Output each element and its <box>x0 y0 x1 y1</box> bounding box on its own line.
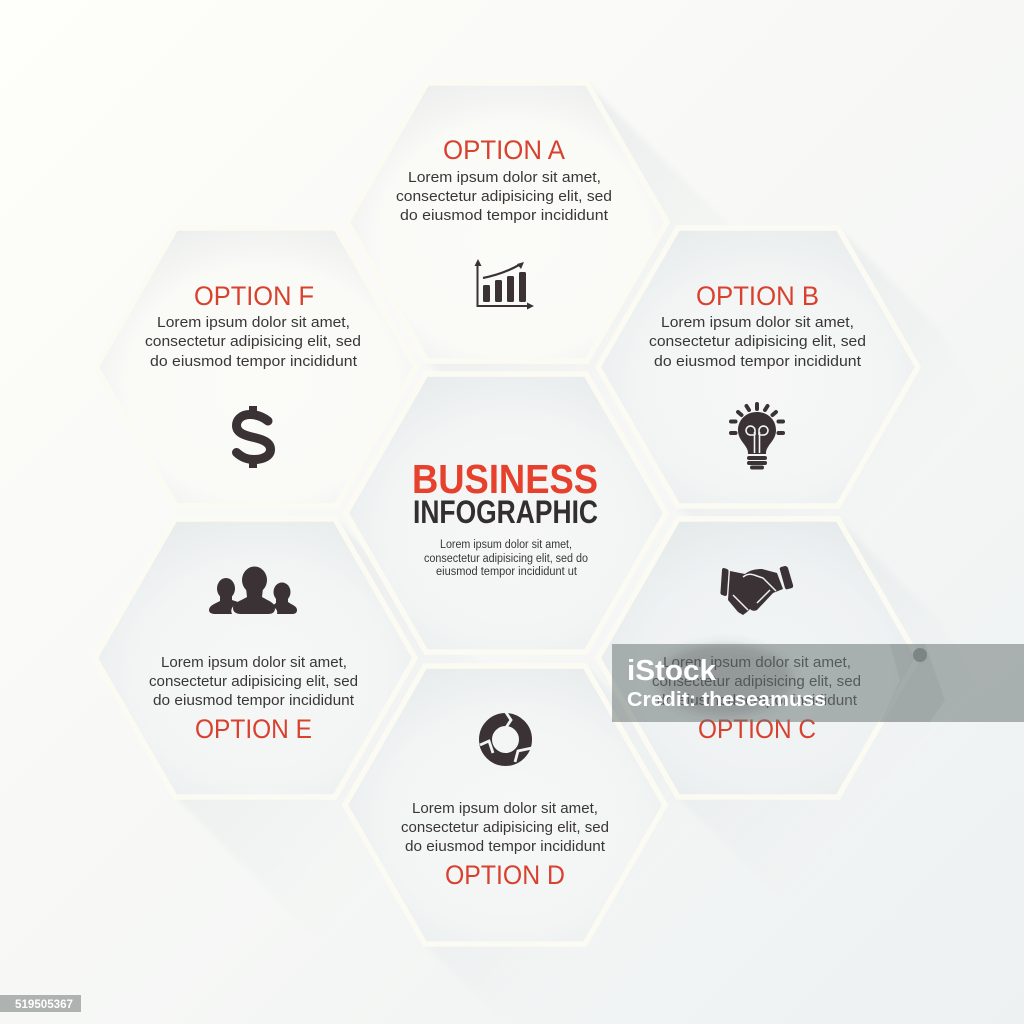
hexagon B <box>598 228 918 506</box>
long shadows <box>175 83 1018 1017</box>
watermark: credit: Credit: theseamuss <box>627 689 826 711</box>
text: option A body: Lorem ipsum dolor sit amet, <box>408 169 601 186</box>
image id tag <box>0 995 81 1012</box>
hexagon F <box>96 228 416 506</box>
heading: option D: OPTION D <box>445 860 565 890</box>
text: option A body <box>396 169 612 224</box>
text: centre body: consectetur adipisicing elit, sed do <box>424 553 588 565</box>
text: option D body: consectetur adipisicing elit, sed <box>401 819 609 836</box>
watermark: iStock: iStock <box>627 655 717 687</box>
text: option E body: consectetur adipisicing elit, sed <box>149 673 358 690</box>
text: option C body: consectetur adipisicing elit, sed <box>652 673 861 690</box>
text: option E body: Lorem ipsum dolor sit amet, <box>161 654 347 671</box>
title: business: BUSINESS <box>412 456 598 502</box>
panel: option A <box>347 83 667 361</box>
panel: option F <box>96 228 416 506</box>
text: option B body <box>649 314 866 370</box>
watermark band <box>612 644 1024 722</box>
hexagon D <box>345 666 665 944</box>
text: option A body: do eiusmod tempor incididunt <box>400 207 609 224</box>
text: option E body <box>149 654 358 709</box>
text: centre body: Lorem ipsum dolor sit amet, <box>440 539 572 551</box>
text: option F body: do eiusmod tempor incididunt <box>150 353 358 370</box>
text: option E body: do eiusmod tempor incididunt <box>153 692 355 709</box>
text: option A body: consectetur adipisicing elit, sed <box>396 188 612 205</box>
text: option D body: do eiusmod tempor incididunt <box>405 838 606 855</box>
text: option F body <box>145 314 361 370</box>
text: option B body: do eiusmod tempor incididunt <box>654 353 862 370</box>
panel: option D <box>345 666 665 944</box>
icon: cycle arrows <box>480 711 532 762</box>
text: option B body: consectetur adipisicing elit, sed <box>649 333 866 350</box>
panel: centre <box>346 374 666 652</box>
text: option D body: Lorem ipsum dolor sit amet, <box>412 800 598 817</box>
image id tag: 519505367 <box>15 999 73 1011</box>
title: infographic: INFOGRAPHIC <box>413 494 598 530</box>
text: centre body: eiusmod tempor incididunt ut <box>436 566 578 578</box>
text: option D body <box>401 800 609 855</box>
text: centre body <box>424 539 588 578</box>
heading: option C: OPTION C <box>698 714 816 744</box>
panel: option E <box>95 519 415 797</box>
icon: dollar sign <box>236 406 270 468</box>
text: option C body <box>652 654 861 709</box>
text: option F body: consectetur adipisicing elit, sed <box>145 333 361 350</box>
panel: option C <box>598 519 918 797</box>
icon: bar chart <box>474 259 534 310</box>
heading: option A: OPTION A <box>443 135 565 165</box>
hexagon centre <box>346 374 666 652</box>
text: option C body: do eiusmod tempor incididunt <box>657 692 858 709</box>
text: option B body: Lorem ipsum dolor sit amet, <box>661 314 854 331</box>
text: option C body: Lorem ipsum dolor sit amet, <box>663 654 851 671</box>
hexagon A <box>347 83 667 361</box>
heading: option B: OPTION B <box>696 281 819 311</box>
icon: light bulb <box>731 404 783 468</box>
icon: handshake <box>720 566 793 615</box>
hexagon C <box>598 519 918 797</box>
panel: option B <box>598 228 918 506</box>
heading: option E: OPTION E <box>195 714 312 744</box>
heading: option F: OPTION F <box>194 281 314 311</box>
icon: people <box>209 566 297 614</box>
text: option F body: Lorem ipsum dolor sit amet, <box>157 314 350 331</box>
hexagon E <box>95 519 415 797</box>
